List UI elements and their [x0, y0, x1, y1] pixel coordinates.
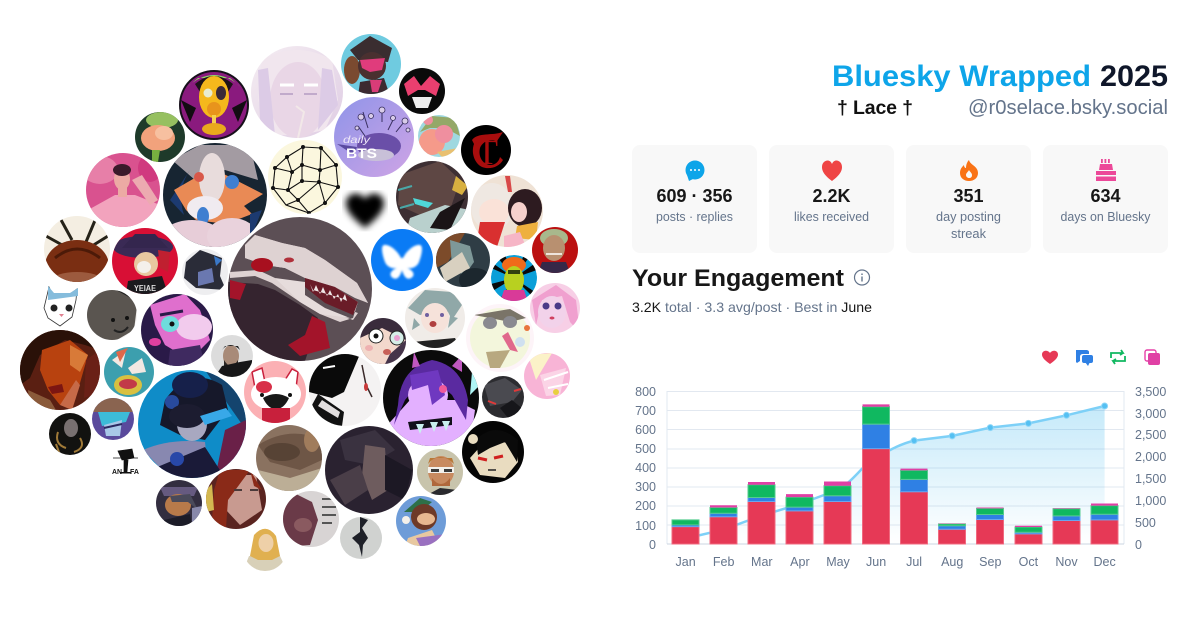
avatar: dark painted figures	[325, 426, 413, 514]
left axis labels: 400	[635, 461, 656, 475]
month labels: Sep	[979, 555, 1001, 569]
heading: Your Engagement: Your Engagement	[632, 265, 844, 292]
month labels: Apr	[790, 555, 810, 569]
icon: speech bubble	[686, 160, 704, 181]
left axis labels: 200	[635, 499, 656, 513]
avatar: pink portrait	[82, 153, 162, 228]
right axis labels	[1135, 385, 1166, 552]
left axis labels: 600	[635, 423, 656, 437]
avatar: teal fish	[104, 347, 154, 397]
avatar: purple hat man	[156, 480, 202, 526]
avatar: blurred black heart	[346, 194, 384, 228]
stat label: days on Bluesky	[1060, 210, 1151, 224]
avatar: auburn hair with antlers	[44, 216, 110, 282]
chart: monthly engagement bars with cumulative area	[635, 385, 1166, 569]
avatar: dark blue wolf	[182, 249, 228, 295]
avatar: red-haired portrait	[206, 469, 266, 529]
avatar: gray-haired anime	[405, 288, 465, 348]
avatar: green face sunburst	[491, 255, 538, 302]
engagement summary: 3.2K total · 3.3 avg/post · Best in June	[632, 299, 872, 315]
month labels: Jan	[676, 555, 696, 569]
left axis labels: 100	[635, 519, 656, 533]
avatar: gas mask trophy	[179, 70, 249, 140]
avatar: bat creature with text	[283, 491, 339, 547]
avatar: gray wolf in dark	[436, 233, 490, 287]
avatar: blue glitch face	[92, 398, 134, 440]
avatar: dark teal dragon	[396, 161, 470, 235]
left axis labels: 500	[635, 442, 656, 456]
month labels: Nov	[1055, 555, 1078, 569]
icon: replies bubbles	[1076, 350, 1093, 366]
right axis labels: 3,500	[1135, 385, 1166, 399]
month labels: Dec	[1093, 555, 1116, 569]
avatar: black-haired devil girl	[462, 421, 524, 483]
stat value: 351	[953, 186, 984, 206]
icon: info	[854, 270, 870, 285]
bars: replies	[672, 424, 1118, 534]
stat label: day posting	[936, 210, 1001, 224]
avatar: flower-haired character	[418, 115, 460, 160]
line points	[911, 403, 1108, 444]
bars: reposts	[672, 407, 1118, 532]
grid lines	[667, 392, 1124, 525]
avatar: man on red	[532, 227, 578, 273]
panel: stat posts and replies	[632, 145, 757, 253]
avatar: bearded man photo	[211, 335, 253, 378]
avatar: peach flower	[135, 112, 185, 162]
left axis labels: 0	[649, 538, 656, 552]
right axis labels: 500	[1135, 516, 1156, 530]
panel: stat days on Bluesky	[1043, 145, 1168, 253]
title: 2025	[1100, 60, 1168, 93]
left axis labels	[635, 385, 656, 552]
panel: stat streak	[906, 145, 1031, 253]
avatar: orange fox	[163, 143, 267, 247]
left axis labels: 800	[635, 385, 656, 399]
avatar: pink anime girl	[530, 283, 580, 333]
icon: heart	[822, 160, 842, 181]
month labels: Jul	[906, 555, 922, 569]
avatar: rainbow glasses girl	[360, 318, 406, 364]
avatar: pink ribbon anime	[524, 353, 570, 399]
month labels: Feb	[713, 555, 735, 569]
avatar: white cat with blue hat	[44, 286, 78, 326]
stat label: posts · replies	[656, 210, 733, 224]
right axis labels: 2,500	[1135, 428, 1166, 442]
avatar: orange-lit portrait	[20, 330, 100, 410]
stat value: 609 · 356	[656, 186, 732, 206]
panel: legend icons	[1042, 350, 1160, 366]
icon: likes heart	[1042, 351, 1058, 364]
icon: quotes squares	[1145, 350, 1160, 365]
avatar: antifa film camera logo	[112, 449, 139, 476]
avatar: pale lavender portrait	[251, 46, 343, 138]
month labels: Oct	[1019, 555, 1039, 569]
bars: quotes	[710, 404, 1118, 527]
avatar: blue hat lady	[138, 370, 246, 478]
panel: avatar bubble cloud	[20, 34, 580, 571]
stat label second line: streak	[951, 227, 987, 241]
avatar: blonde long hair	[247, 528, 283, 571]
avatar: sunglasses man	[417, 449, 463, 495]
avatar: Bluesky butterfly	[371, 229, 433, 291]
avatar: red T logo	[461, 125, 511, 175]
right axis labels: 1,000	[1135, 494, 1166, 508]
stat label: likes received	[794, 210, 869, 224]
avatar: sleeping brown creature	[256, 425, 322, 491]
month labels: May	[826, 555, 851, 569]
avatar: dark curly hair	[49, 413, 91, 455]
avatar: pink snake creature	[141, 294, 213, 366]
icon: flame	[960, 160, 978, 181]
avatar: dark wolf red eyes	[482, 376, 524, 418]
avatar: two hugging anime girls	[471, 175, 543, 247]
avatar: antifa film camera logo: FA	[130, 469, 139, 476]
avatar: purple-haired horned girl	[383, 350, 480, 446]
month labels: Mar	[751, 555, 773, 569]
right axis labels: 2,000	[1135, 450, 1166, 464]
right axis labels: 1,500	[1135, 472, 1166, 486]
month labels	[676, 555, 1116, 569]
left axis labels: 300	[635, 480, 656, 494]
avatar: witch hat character	[112, 228, 178, 294]
avatar: cartoon bearded man	[396, 496, 446, 546]
avatar: daily BTS whale: BTS	[346, 145, 377, 161]
avatar: daily BTS whale	[334, 97, 414, 177]
avatar: geometric mesh	[268, 140, 342, 215]
handle: @r0selace.bsky.social	[968, 97, 1168, 119]
cumulative line	[686, 406, 1105, 538]
icon: reposts arrows	[1111, 350, 1125, 364]
right axis labels: 0	[1135, 538, 1142, 552]
avatar: red T logo: T	[476, 132, 498, 172]
cumulative area	[686, 406, 1105, 544]
bars: likes	[672, 449, 1118, 544]
month labels: Aug	[941, 555, 963, 569]
stat value: 634	[1090, 186, 1121, 206]
stat value: 2.2K	[812, 186, 851, 206]
panel: stat likes	[769, 145, 894, 253]
avatar: witch hat character: YEIAE	[134, 284, 157, 293]
avatar: antifa film camera logo: AN	[112, 469, 122, 476]
left axis labels: 700	[635, 404, 656, 418]
avatar: white cat on pink	[244, 361, 306, 423]
avatar: black and white glitch	[309, 354, 381, 426]
avatar: white dragon skull	[228, 217, 372, 361]
avatar: gray dog	[87, 290, 137, 340]
month labels: Jun	[866, 555, 886, 569]
title: Bluesky Wrapped	[832, 60, 1091, 93]
icon: cake	[1096, 159, 1116, 181]
avatar: black and pink grin	[399, 68, 445, 114]
right axis labels: 3,000	[1135, 407, 1166, 421]
avatar: fluffy white monster	[466, 304, 534, 372]
display name: † Lace †	[837, 97, 913, 119]
avatar: daily BTS whale: daily	[343, 135, 371, 146]
avatar: gray with black silhouette	[340, 517, 382, 559]
avatar: pink masked character	[341, 34, 401, 96]
